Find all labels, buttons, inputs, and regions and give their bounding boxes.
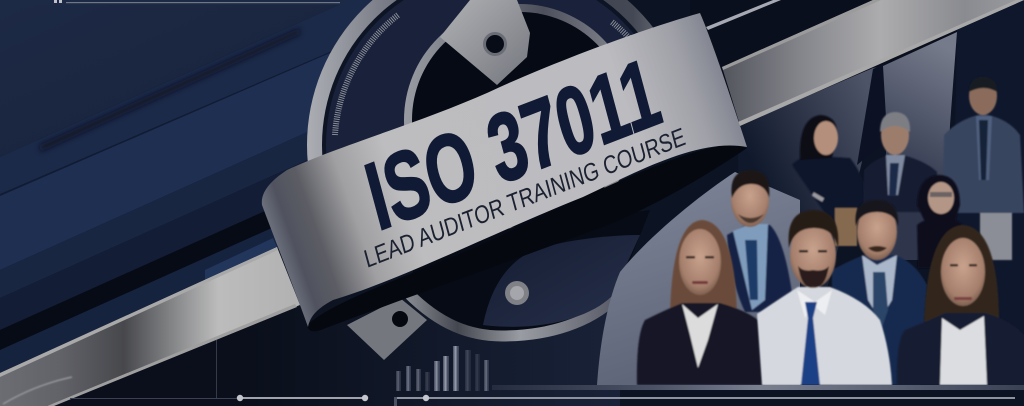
top left thin line xyxy=(54,0,340,3)
person: woman front right xyxy=(897,225,1024,385)
person: man centre right xyxy=(832,200,927,385)
person: woman back with crossed arms xyxy=(792,115,870,246)
person: woman front left xyxy=(637,220,763,385)
ribbon dark underside xyxy=(307,145,747,331)
upper right silver band xyxy=(722,0,1024,126)
bottom timeline right xyxy=(394,395,1015,406)
lower diamond plate xyxy=(347,298,427,360)
left diagonal stripes xyxy=(0,0,450,373)
person: gray haired man xyxy=(863,112,937,212)
black slit xyxy=(857,64,888,165)
inner dark disc xyxy=(404,4,636,236)
bottom timeline left xyxy=(70,340,368,401)
person: man back left xyxy=(727,170,793,312)
screw xyxy=(505,281,529,305)
lower left silver band xyxy=(0,247,300,406)
subtitle: Lead Auditor Training Course: LEAD AUDITOR TRAINING COURSE xyxy=(361,123,688,274)
gray panel behind team xyxy=(880,32,957,260)
top pin plate xyxy=(440,0,530,85)
bar chart xyxy=(396,346,489,391)
gear ring xyxy=(307,0,653,180)
right navy column xyxy=(950,0,1024,385)
lower dark area xyxy=(408,210,650,335)
top right dark bands xyxy=(690,0,1024,130)
lower silver arc xyxy=(408,293,615,336)
tick rings xyxy=(335,15,648,135)
bottom bar xyxy=(492,385,1024,390)
person: woman with glasses xyxy=(917,175,962,268)
ribbon xyxy=(262,13,747,327)
mid panel behind team xyxy=(738,66,885,385)
gray curve behind team xyxy=(597,172,800,385)
lower dark background xyxy=(47,260,620,406)
person: standing man back right xyxy=(942,77,1024,260)
person: man front centre xyxy=(757,210,892,385)
lower mechanical shape xyxy=(483,235,640,327)
